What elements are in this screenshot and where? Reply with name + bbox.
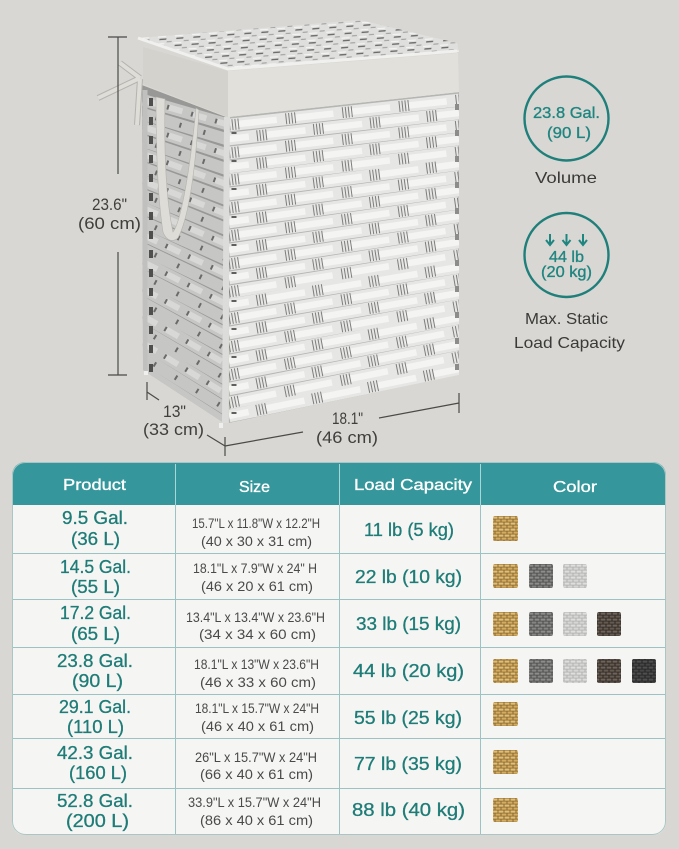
height dimension [78,37,141,375]
fabric handle [156,97,199,240]
row: 9.5 Gal: 11 lb (5 kg) [364,520,454,540]
row: 9.5 Gal [62,508,518,549]
row: 52.8 Gal: (200 L) [66,811,129,831]
depth dimension: 13" [163,402,186,421]
lid liner fold [143,47,228,117]
row: 42.3 Gal: (160 L) [69,763,127,783]
row: 29.1 Gal [59,697,518,737]
row: 9.5 Gal: (36 L) [71,529,120,549]
product image: wicker laundry basket [98,20,459,428]
row: 14.5 Gal: 18.1"L x 7.9"W x 24" H [193,560,317,576]
row: 23.8 Gal: (46 x 33 x 60 cm) [200,674,316,690]
width dimension [225,393,459,447]
icon: down arrows [546,234,587,245]
row: 17.2 Gal: (34 x 34 x 60 cm) [199,626,316,642]
row: 17.2 Gal: 13.4"L x 13.4"W x 23.6"H [186,609,325,625]
row: 52.8 Gal: (86 x 40 x 61 cm) [200,812,313,828]
volume badge: (90 L) [547,125,591,142]
table header: Size [239,479,270,496]
row: 42.3 Gal [57,743,518,783]
load capacity badge: 44 lb [549,249,584,266]
depth dimension [143,382,225,456]
table header [63,477,598,496]
row: 23.8 Gal [57,651,656,691]
row: 14.5 Gal: (55 L) [71,577,120,597]
table header: Load Capacity [354,477,472,494]
row: 23.8 Gal: 44 lb (20 kg) [353,661,464,681]
table body [12,462,666,835]
load capacity badge: (20 kg) [541,264,592,281]
row: 29.1 Gal: 55 lb (25 kg) [354,708,462,728]
table header: Color [553,479,598,496]
row: 23.8 Gal: (90 L) [72,671,123,691]
row: 23.8 Gal: 23.8 Gal. [57,651,133,671]
row: 52.8 Gal: 52.8 Gal. [57,791,133,811]
comparison table [12,462,666,835]
row: 14.5 Gal: 14.5 Gal. [60,557,131,577]
volume badge: Volume [535,170,597,187]
row: 52.8 Gal: 88 lb (40 kg) [352,800,465,820]
row: 29.1 Gal: (46 x 40 x 61 cm) [201,718,314,734]
basket front panel [229,92,459,423]
row: 23.8 Gal: 18.1"L x 13"W x 23.6"H [194,656,319,672]
row: 14.5 Gal [60,557,587,597]
row: 29.1 Gal: 29.1 Gal. [59,697,131,717]
height dimension: 23.6" [92,195,127,214]
lid top [138,20,459,70]
row: 29.1 Gal: 18.1"L x 15.7"W x 24"H [195,700,319,716]
load capacity badge [514,213,625,352]
volume badge [524,76,608,187]
table header: Product [63,477,127,494]
lid rim [138,38,457,69]
basket side panel [142,85,226,424]
row: 9.5 Gal: (40 x 30 x 31 cm) [201,533,312,549]
row: 14.5 Gal: 22 lb (10 kg) [355,567,462,587]
row: 52.8 Gal: 33.9"L x 15.7"W x 24"H [188,794,321,810]
row: 52.8 Gal [57,791,518,831]
row: 42.3 Gal: 26"L x 15.7"W x 24"H [195,749,317,765]
volume badge: 23.8 Gal. [533,105,600,122]
row: 14.5 Gal: (46 x 20 x 61 cm) [201,578,313,594]
row: 9.5 Gal: 15.7"L x 11.8"W x 12.2"H [192,515,320,531]
corner post [225,117,227,423]
row: 42.3 Gal: 77 lb (35 kg) [354,754,462,774]
row: 17.2 Gal: 33 lb (15 kg) [356,614,461,634]
row: 29.1 Gal: (110 L) [67,717,124,737]
row: 42.3 Gal: (66 x 40 x 61 cm) [200,766,313,782]
row: 42.3 Gal: 42.3 Gal. [57,743,133,763]
row: 17.2 Gal: (65 L) [71,624,120,644]
width dimension: 18.1" [332,409,363,428]
feet [146,371,221,428]
height dimension: (60 cm) [78,214,141,233]
row: 9.5 Gal: 9.5 Gal. [62,508,128,528]
load capacity badge: Max. Static [525,311,608,328]
fabric bow tie [98,63,140,125]
load capacity badge: Load Capacity [514,335,625,352]
row: 17.2 Gal: 17.2 Gal. [60,603,131,623]
width dimension: (46 cm) [316,428,378,447]
depth dimension: (33 cm) [143,420,204,439]
row: 17.2 Gal [60,603,621,644]
